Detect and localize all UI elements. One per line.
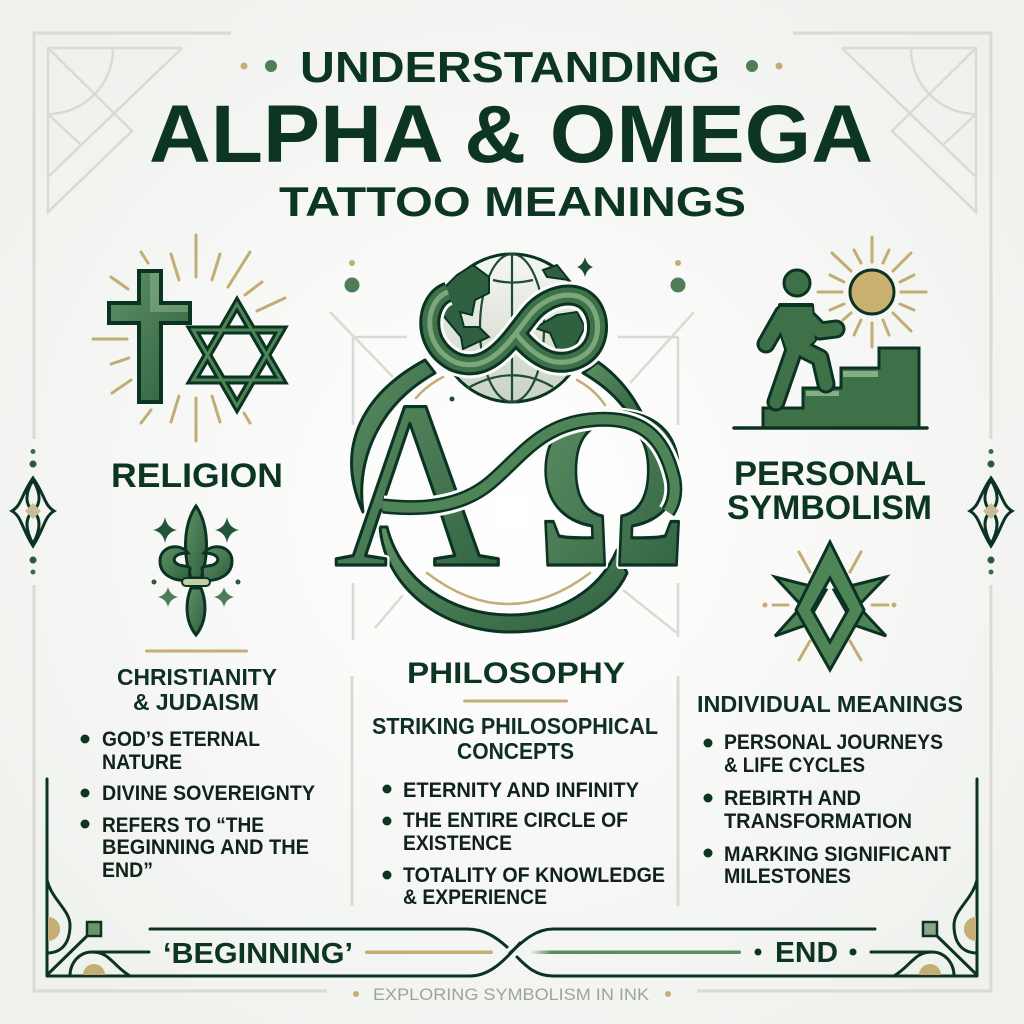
side ornament: left: [12, 449, 54, 574]
panel: christianity and judaism: END”: [102, 859, 153, 882]
panel: christianity and judaism: GOD’S ETERNAL: [102, 728, 260, 751]
title: TATTOO MEANINGS: [279, 178, 746, 225]
panel: individual meanings: TRANSFORMATION: [724, 810, 912, 833]
side ornament: right: [970, 449, 1012, 574]
panel: individual meanings: PERSONAL JOURNEYS: [724, 731, 943, 754]
bottom banner frame with corner flourishes: [47, 779, 977, 976]
panel: christianity and judaism: & JUDAISM: [133, 689, 259, 715]
panel: philosophy: EXISTENCE: [403, 832, 512, 855]
heading: personal symbolism: [727, 455, 932, 527]
banner label: beginning: ‘BEGINNING’: [163, 938, 353, 970]
central emblem: alpha and omega with ring, globe and infinity: A: [334, 351, 500, 617]
title: ALPHA & OMEGA: [149, 89, 873, 180]
letters: A: [334, 351, 500, 617]
letters: Ω: [537, 359, 687, 616]
panel: philosophy: & EXPERIENCE: [403, 886, 547, 909]
panel: christianity and judaism: REFERS TO “THE: [102, 814, 264, 837]
ring segments: [352, 360, 645, 632]
panel: christianity and judaism: [80, 650, 315, 882]
heading: personal symbolism: SYMBOLISM: [727, 489, 932, 527]
title: UNDERSTANDING: [300, 43, 720, 92]
panel: philosophy: TOTALITY OF KNOWLEDGE: [403, 864, 665, 887]
central emblem: alpha and omega with ring, globe and infinity: Ω: [537, 359, 687, 616]
heading: personal symbolism: PERSONAL: [734, 455, 926, 493]
letters: [334, 351, 687, 617]
heading: religion: RELIGION: [111, 457, 283, 495]
panel: individual meanings: MARKING SIGNIFICANT: [724, 843, 951, 866]
gold arcs: [416, 377, 605, 604]
panel: philosophy: STRIKING PHILOSOPHICAL: [372, 713, 658, 739]
icon: person climbing stairs toward sun: [734, 237, 927, 428]
panel: christianity and judaism: BEGINNING AND THE: [102, 836, 309, 859]
panel: christianity and judaism: NATURE: [102, 751, 182, 774]
swoosh joining alpha crossbar to omega: [383, 419, 675, 512]
title decorative dots: [240, 60, 782, 72]
globe: [438, 254, 586, 402]
icon: fleur-de-lis with sparkles: [152, 506, 240, 635]
central emblem: alpha and omega with ring, globe and infinity: [334, 254, 687, 632]
icon: cross and star of David with rays: [93, 235, 285, 441]
decorative dots and sparkle around emblem: [344, 257, 686, 402]
icon: interlaced star with rays: [762, 542, 896, 670]
panel: philosophy: ETERNITY AND INFINITY: [403, 779, 639, 802]
panel: individual meanings: & LIFE CYCLES: [724, 754, 865, 777]
title: [149, 43, 873, 225]
panel: individual meanings: MILESTONES: [724, 865, 851, 888]
panel: christianity and judaism: CHRISTIANITY: [117, 664, 277, 690]
panel: philosophy: PHILOSOPHY: [407, 657, 625, 690]
infinity loop: [430, 292, 598, 365]
panel: individual meanings: REBIRTH AND: [724, 787, 861, 810]
panel: christianity and judaism: DIVINE SOVEREIGNTY: [102, 782, 315, 805]
panel: individual meanings: [697, 691, 963, 888]
banner label: end: END: [775, 937, 838, 969]
panel: philosophy: THE ENTIRE CIRCLE OF: [403, 809, 628, 832]
panel: philosophy: CONCEPTS: [457, 738, 574, 764]
panel: individual meanings: INDIVIDUAL MEANINGS: [697, 691, 963, 717]
panel: philosophy: [372, 657, 665, 909]
footer tagline: EXPLORING SYMBOLISM IN INK: [373, 985, 650, 1004]
